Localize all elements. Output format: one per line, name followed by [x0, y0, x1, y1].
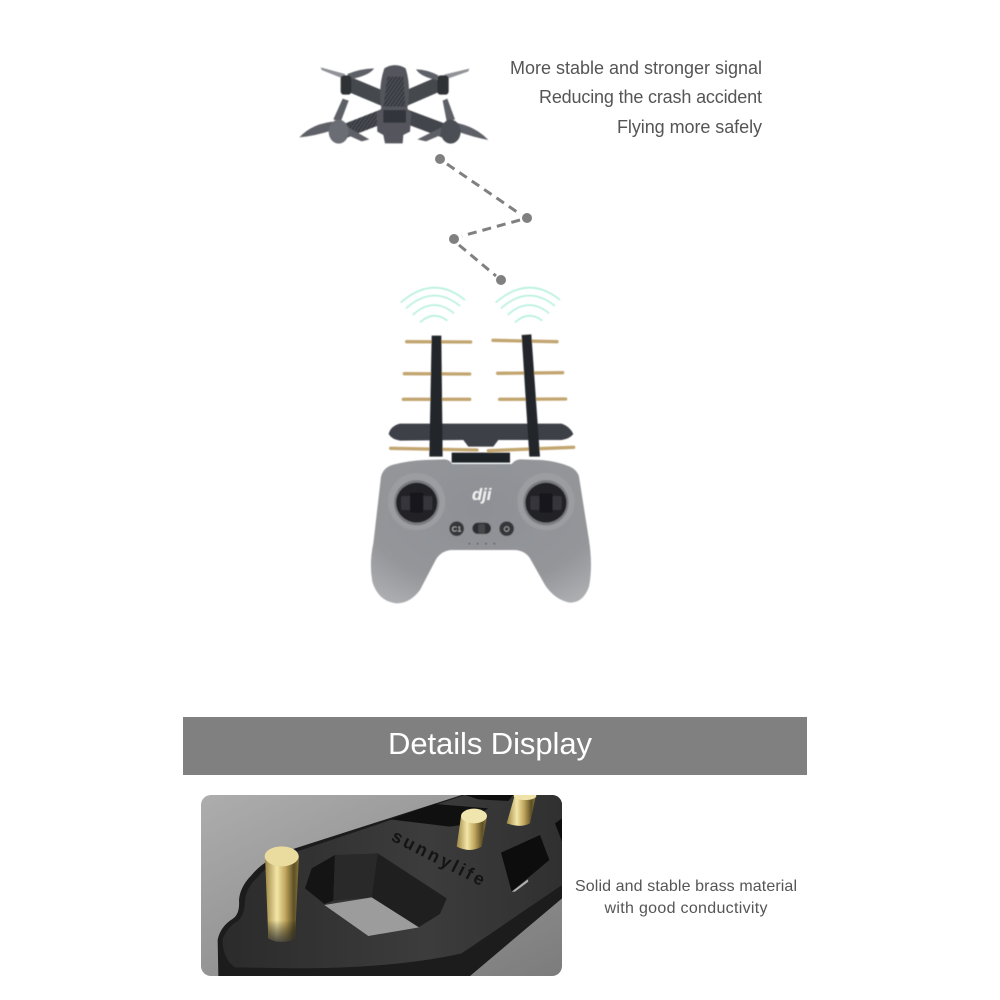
window right sliver	[512, 879, 528, 892]
section heading: Details Display	[388, 726, 592, 761]
plate	[218, 795, 562, 976]
drone motors	[329, 75, 461, 144]
carbon fibre hatch	[383, 77, 405, 107]
drone arms	[343, 84, 447, 132]
rear vent	[383, 110, 406, 123]
path nodes	[435, 154, 532, 285]
battery LEDs	[468, 543, 495, 544]
medium brass pin	[457, 809, 487, 850]
power button	[499, 521, 514, 536]
caption line 1: Solid and stable brass material	[575, 878, 797, 895]
clamp	[452, 453, 510, 463]
dashed line	[447, 164, 520, 276]
left stick	[388, 473, 445, 530]
hexagon hole left wall	[305, 855, 335, 904]
drone body	[377, 65, 411, 143]
feature line 1: More stable and stronger signal	[510, 58, 762, 78]
mode switch	[472, 523, 491, 534]
antenna uprights	[429, 334, 540, 457]
large brass pin	[265, 846, 299, 942]
brass rods	[391, 340, 574, 451]
phone holder	[389, 424, 573, 447]
logo: dji	[472, 485, 492, 504]
detail caption	[575, 878, 797, 917]
C1 button	[449, 521, 464, 536]
feature line 2: Reducing the crash accident	[539, 87, 762, 107]
section header bar	[183, 717, 807, 775]
C1 button: C1	[452, 524, 462, 533]
feature line 3: Flying more safely	[617, 117, 762, 137]
drone propellers	[299, 67, 488, 141]
drone illustration	[299, 65, 488, 144]
right stick	[517, 473, 575, 530]
hexagon hole back wall	[333, 853, 378, 901]
feature text	[510, 58, 762, 137]
window top back	[465, 795, 513, 801]
photo background	[201, 795, 562, 976]
window edge	[555, 818, 562, 842]
hexagon hole opening	[324, 897, 419, 936]
antenna assembly	[389, 288, 574, 463]
hexagon hole right wall	[372, 853, 447, 927]
signal path	[435, 154, 532, 285]
detail photo: brass pins	[201, 795, 562, 976]
caption line 2: with good conductivity	[604, 900, 768, 917]
far brass pin	[507, 792, 536, 826]
window top	[390, 804, 488, 827]
plate top surface	[222, 795, 562, 968]
wifi icons	[401, 288, 560, 322]
remote controller	[371, 459, 591, 603]
controller body	[371, 459, 591, 603]
brand text: sunnylife	[389, 826, 488, 890]
window right	[501, 835, 549, 892]
